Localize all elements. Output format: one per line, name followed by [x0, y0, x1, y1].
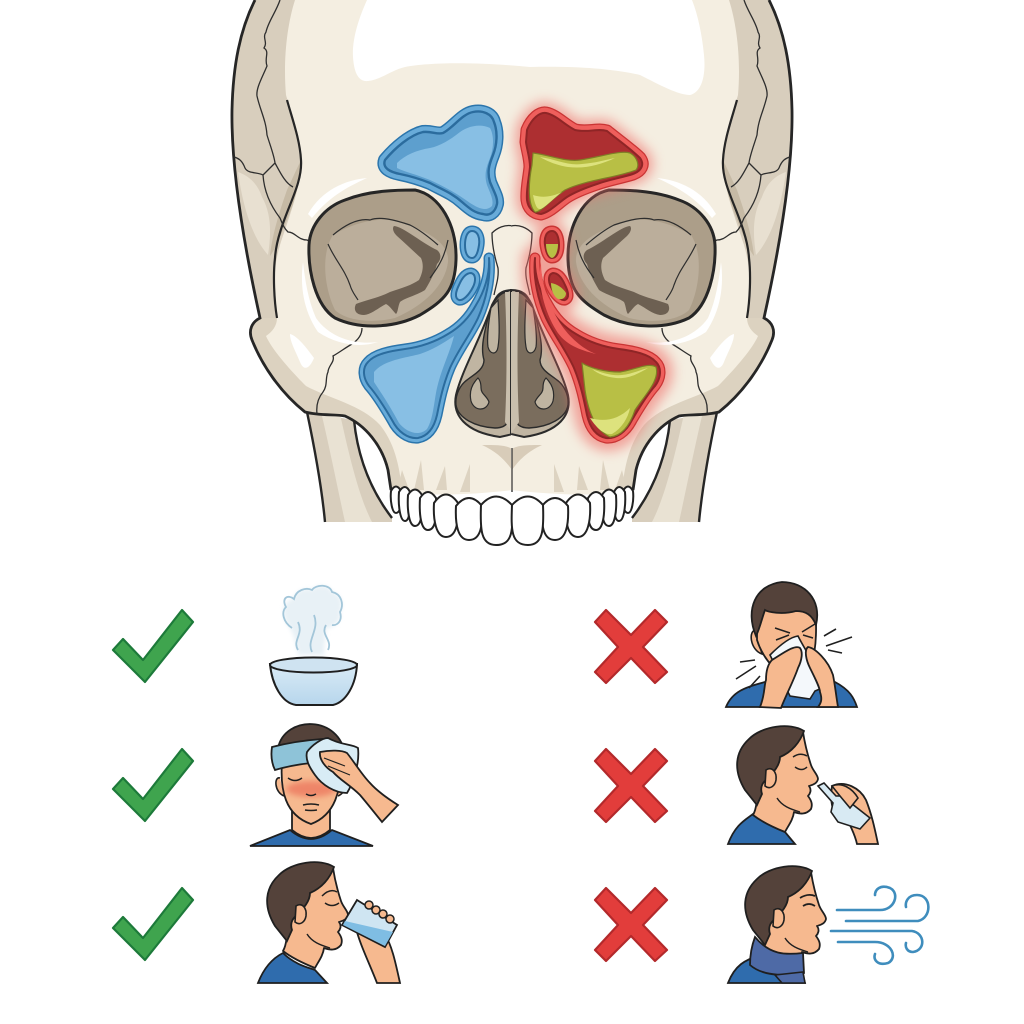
- icon: man using nasal spray: [728, 726, 878, 844]
- headband: [271, 739, 322, 770]
- healthy maxillary sinus (blue): [364, 258, 489, 438]
- hair: [278, 724, 345, 755]
- water level: [343, 921, 393, 946]
- head profile: [267, 862, 348, 968]
- fingers: [832, 785, 858, 808]
- spray bottle: [818, 783, 870, 829]
- open eye: [800, 895, 815, 906]
- jacket: [728, 955, 805, 983]
- steam cloud: [284, 586, 342, 655]
- tissue: [770, 636, 827, 699]
- row 1 cross icon: [595, 610, 667, 683]
- shirt: [728, 814, 795, 844]
- inflamed sinus glow: [526, 113, 660, 438]
- row 2 cross icon: [595, 749, 667, 822]
- row 1 check icon: [113, 610, 193, 682]
- icon: man blowing nose: [726, 582, 857, 708]
- bowl body: [270, 664, 357, 705]
- compress cloth: [307, 738, 358, 793]
- row 2 check icon: [113, 749, 193, 821]
- skull right half: [511, 0, 792, 545]
- closed eye: [322, 891, 339, 906]
- wind lines: [831, 887, 928, 964]
- steam outline: [283, 586, 342, 652]
- squinting eyes: [775, 624, 815, 640]
- neck: [292, 805, 330, 838]
- finger lines: [324, 758, 350, 775]
- head profile: [737, 726, 818, 832]
- scarf: [750, 937, 804, 975]
- ears: [276, 778, 346, 796]
- face: [757, 605, 816, 682]
- closed eye and red nose: [793, 754, 807, 770]
- shirt: [726, 682, 857, 707]
- inflamed ethmoid sinuses: [545, 231, 568, 300]
- hand left: [760, 647, 802, 708]
- hair: [752, 582, 817, 636]
- head profile: [745, 866, 826, 972]
- arm and hand: [831, 784, 878, 844]
- water glass: [342, 900, 397, 947]
- inflamed maxillary sinus with fluid: [535, 258, 660, 438]
- row 3 check icon: [113, 888, 193, 960]
- skull left half: [232, 0, 513, 545]
- healthy frontal sinus (blue): [384, 111, 497, 215]
- eyes nose and mouth: [288, 778, 319, 810]
- bowl rim: [270, 658, 357, 672]
- inflamed frontal sinus with fluid: [526, 113, 642, 214]
- sneeze lines: [736, 629, 852, 688]
- face: [282, 762, 340, 824]
- scarf tail: [775, 972, 805, 983]
- icon: steaming bowl: [270, 586, 357, 705]
- icon: man in cold wind with scarf: [728, 866, 928, 983]
- healthy ethmoid sinuses (blue): [456, 231, 479, 300]
- forehead cut-away: [353, 0, 704, 95]
- shirt: [258, 953, 327, 983]
- narrow duct highlight: [540, 262, 596, 354]
- ear: [751, 630, 762, 654]
- hand right: [806, 647, 838, 707]
- icon: man with cold compress: [250, 724, 398, 846]
- flushed cheeks: [286, 781, 336, 797]
- row 3 cross icon: [595, 888, 667, 961]
- hand and arm: [320, 751, 398, 822]
- frontal fluid: [529, 152, 638, 212]
- fingers: [365, 901, 394, 923]
- skull illustration: [232, 0, 792, 545]
- maxillary fluid: [582, 363, 657, 437]
- icon: man drinking water: [258, 862, 400, 983]
- shirt: [250, 830, 373, 846]
- arm: [355, 925, 400, 983]
